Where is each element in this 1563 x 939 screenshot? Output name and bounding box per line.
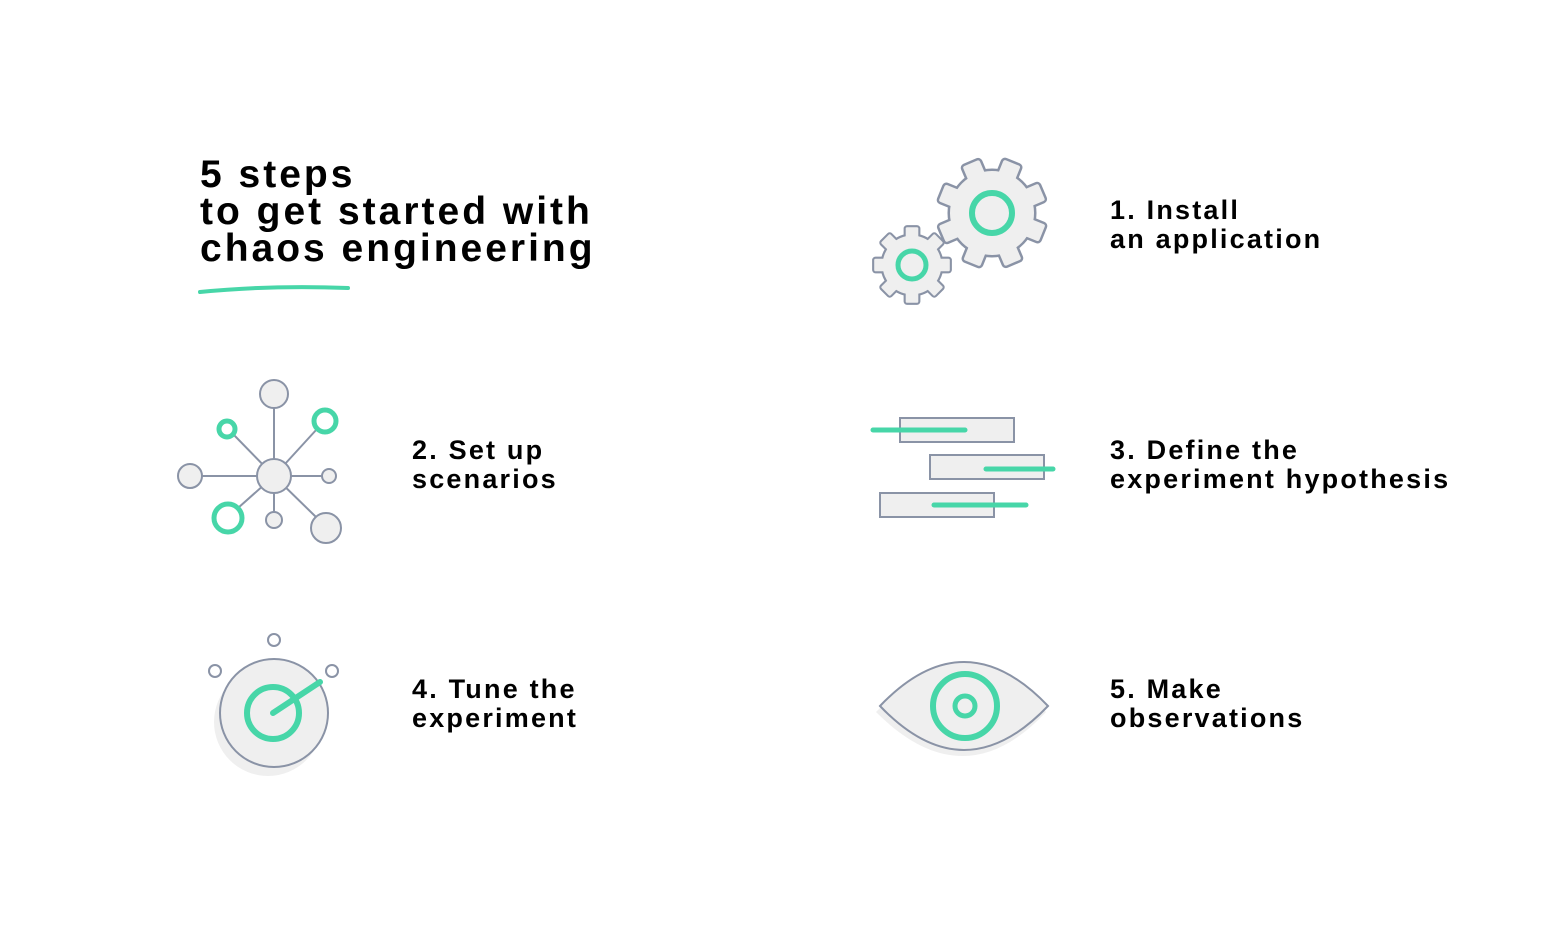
- step 2 text: 2. Set up: [412, 435, 544, 465]
- title: [200, 153, 596, 270]
- step 3 text: [1110, 435, 1450, 494]
- step 2 text: [412, 435, 558, 494]
- step 5 text: observations: [1110, 703, 1304, 733]
- step 3 text: experiment hypothesis: [1110, 464, 1450, 494]
- step 1 text: [1110, 195, 1322, 254]
- step 1 text: 1. Install: [1110, 195, 1240, 225]
- step 1 text: an application: [1110, 224, 1322, 254]
- title: 5 steps: [200, 153, 355, 196]
- icon: hypothesis bars: [873, 418, 1053, 517]
- step 3 text: 3. Define the: [1110, 435, 1299, 465]
- step 5 text: 5. Make: [1110, 674, 1223, 704]
- icon: gears: [874, 143, 1062, 303]
- step 2 text: scenarios: [412, 464, 558, 494]
- title underline: [200, 287, 348, 292]
- step 4 text: [412, 674, 578, 733]
- icon: network: [178, 380, 341, 543]
- icon: dial: [209, 634, 338, 776]
- title: to get started with: [200, 190, 593, 233]
- step 5 text: [1110, 674, 1304, 733]
- step 4 text: 4. Tune the: [412, 674, 577, 704]
- title: chaos engineering: [200, 227, 596, 270]
- step 4 text: experiment: [412, 703, 578, 733]
- icon: eye: [876, 662, 1048, 756]
